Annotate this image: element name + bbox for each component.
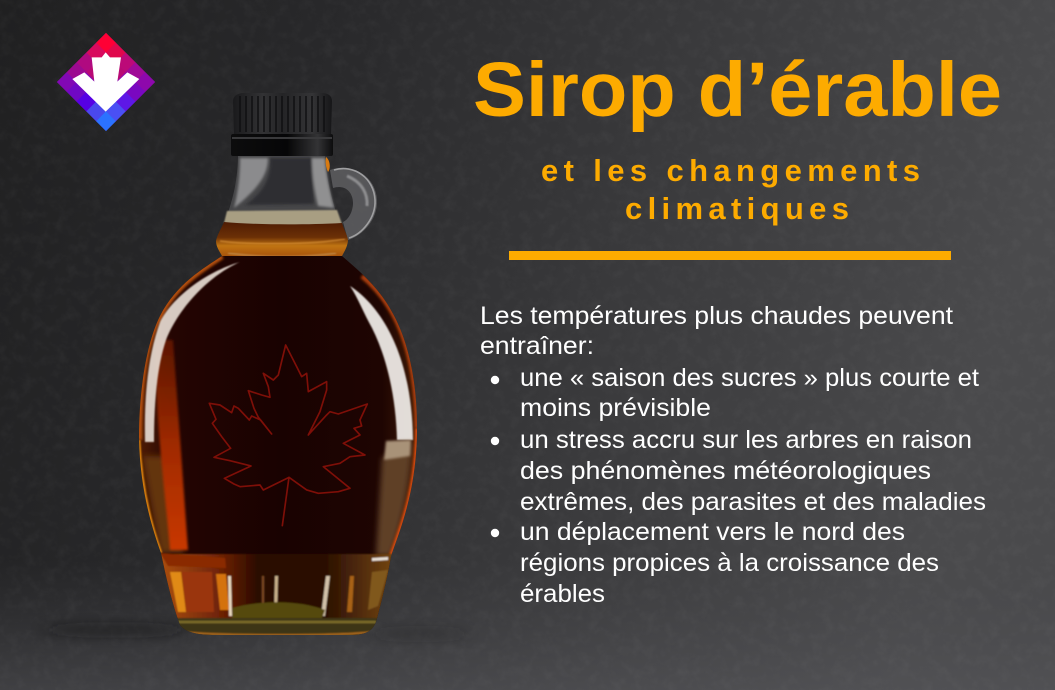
subtitle (541, 153, 920, 226)
bullet: tree stress: un stress accru sur les arbres en raison (520, 426, 972, 454)
bullet: shorter sugar season: moins prévisible (520, 394, 711, 422)
subtitle: et les changements (541, 153, 920, 188)
bullet: northward shift (491, 518, 939, 608)
text block: effects of warmer temperatures (480, 302, 986, 608)
icon: syrup body (139, 256, 417, 635)
right glass highlight (350, 286, 413, 440)
divider rule (509, 251, 951, 260)
icon: bottle cap (231, 93, 333, 156)
intro sentence (480, 302, 953, 360)
bullet: tree stress: extrêmes, des parasites et des maladies (520, 488, 986, 516)
bullet: northward shift: régions propices à la croissance des (520, 549, 939, 577)
icon: syrup foam (224, 210, 342, 225)
bullet: tree stress (491, 426, 986, 516)
title: Sirop d’érable (473, 47, 1002, 133)
bottle of maple syrup (130, 93, 430, 645)
icon: engraved maple leaf (209, 345, 367, 526)
intro sentence: entraîner: (480, 332, 594, 360)
left glass highlight (145, 262, 240, 442)
intro sentence: Les températures plus chaudes peuvent (480, 302, 953, 330)
icon: glass neck (226, 155, 338, 218)
icon: amber syrup ring (216, 222, 348, 257)
icon: glass handle (330, 168, 377, 240)
icon: bottle base (155, 553, 400, 638)
subtitle: climatiques (625, 191, 849, 226)
bullet: northward shift: érables (520, 580, 605, 608)
bullet: shorter sugar season (491, 364, 979, 422)
bullet: shorter sugar season: une « saison des sucres » plus courte et (520, 364, 979, 392)
icon: maple leaf diamond logo (57, 33, 155, 131)
bullet: tree stress: des phénomènes météorologiques (520, 457, 931, 485)
bullet: northward shift: un déplacement vers le nord des (520, 518, 905, 546)
